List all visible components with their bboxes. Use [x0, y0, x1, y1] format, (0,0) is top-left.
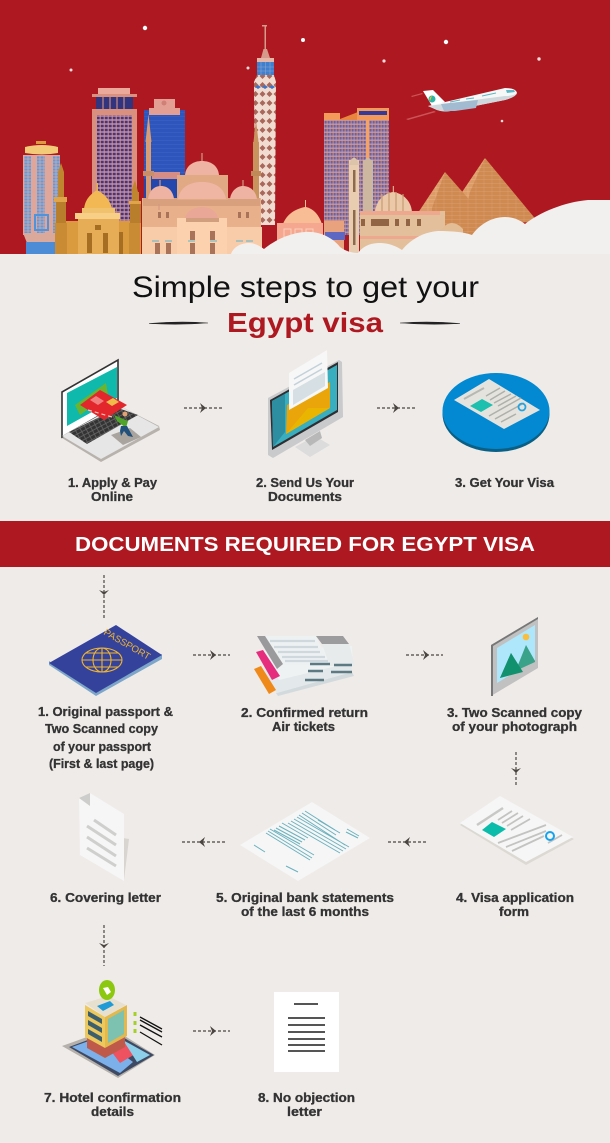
label: document 8: letter — [287, 1105, 322, 1119]
icon: visa application form — [460, 796, 574, 865]
label: document 4: form — [499, 905, 529, 919]
label: document 8: 8. No objection — [258, 1091, 355, 1105]
label: document 3: 3. Two Scanned copy — [447, 706, 582, 720]
label: step 1 — [68, 476, 157, 504]
label: step 3: 3. Get Your Visa — [455, 476, 555, 490]
label: step 1: 1. Apply & Pay — [68, 476, 157, 490]
label: document 1: of your passport — [53, 740, 152, 754]
arrow — [193, 650, 230, 660]
banner: documents required — [0, 521, 610, 567]
icon: hotel on tablet — [62, 980, 162, 1078]
label: document 8 — [258, 1091, 355, 1119]
label: document 1: (First & last page) — [49, 757, 154, 771]
label: document 6: 6. Covering letter — [50, 891, 161, 905]
label: document 7: 7. Hotel confirmation — [44, 1091, 181, 1105]
left cylinder tower — [23, 141, 60, 254]
arrow: down to passport — [99, 575, 109, 618]
icon: bank statement — [240, 802, 370, 881]
blue tower — [144, 99, 185, 200]
label: document 5 — [216, 891, 394, 919]
title line 1: Simple steps to get your — [132, 271, 479, 304]
label: document 4: 4. Visa application — [456, 891, 574, 905]
label: step 2: Documents — [268, 490, 342, 504]
label: document 3: of your photograph — [452, 720, 577, 734]
label: document 3 — [447, 706, 582, 734]
label: step 2: 2. Send Us Your — [256, 476, 354, 490]
label: document 7 — [44, 1091, 181, 1119]
airplane — [406, 88, 517, 120]
icon: laptop with credit card — [62, 360, 160, 462]
arrow: down to form — [511, 752, 521, 786]
icon: photograph — [491, 617, 538, 696]
label: document 2: Air tickets — [272, 720, 335, 734]
label: document 1: Two Scanned copy — [45, 722, 158, 736]
label: step 1: Online — [91, 490, 133, 504]
heading — [132, 271, 479, 338]
icon: passport — [49, 625, 162, 696]
label: document 5: of the last 6 months — [241, 905, 369, 919]
icon: monitor with envelope — [268, 350, 343, 458]
header skyline panel — [0, 0, 610, 254]
icon: no objection letter — [274, 992, 339, 1072]
icon: covering letter — [79, 793, 129, 881]
clouds — [231, 200, 610, 254]
label: step 2 — [256, 476, 354, 504]
title line 2: Egypt visa — [227, 307, 383, 338]
label: document 2: 2. Confirmed return — [241, 706, 368, 720]
arrow — [182, 837, 225, 847]
banner: documents required: DOCUMENTS REQUIRED FOR EGYPT VISA — [75, 534, 535, 556]
arrow — [388, 837, 428, 847]
label: document 1: 1. Original passport & — [38, 705, 173, 719]
label: document 1 — [38, 705, 173, 771]
small coral dome building — [277, 200, 323, 253]
tall hotel tower — [92, 88, 137, 229]
arrow — [193, 1026, 230, 1036]
label: document 7: details — [91, 1105, 134, 1119]
beige mosque with minarets — [349, 158, 463, 253]
arrow — [184, 403, 222, 413]
label: document 5: 5. Original bank statements — [216, 891, 394, 905]
arrow: down to hotel — [99, 925, 109, 966]
icon: air tickets — [254, 636, 355, 696]
pink mosque — [142, 114, 262, 254]
orange glass tower — [324, 108, 389, 254]
arrow — [377, 403, 415, 413]
icon: passport: PASSPORT — [102, 627, 152, 663]
stars — [70, 26, 541, 122]
icon: visa document on blue disc — [442, 373, 550, 452]
Cairo tower — [254, 25, 276, 225]
arrow — [406, 650, 443, 660]
pyramids — [410, 158, 538, 235]
gold mosque — [54, 163, 141, 254]
label: document 4 — [456, 891, 574, 919]
label: document 2 — [241, 706, 368, 734]
